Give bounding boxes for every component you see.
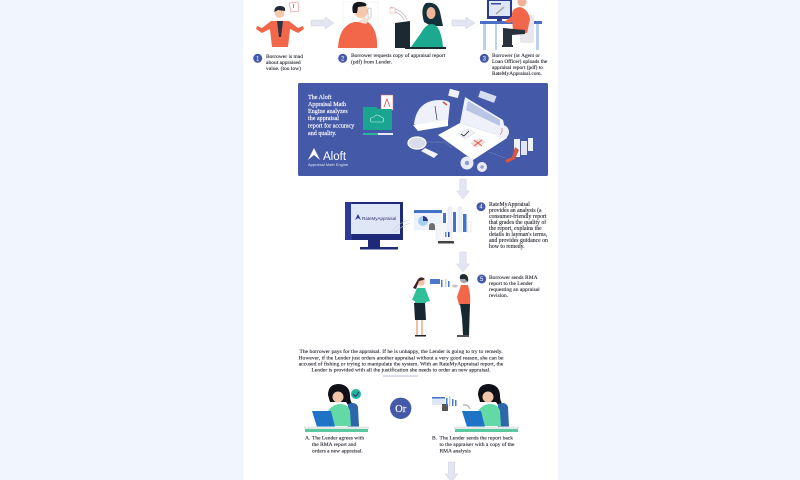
heading: banner text: the appraisal	[308, 116, 339, 122]
text: step 1: Borrower is mad	[266, 54, 303, 60]
illustration: mini bars with arrow	[505, 138, 533, 163]
logo: RateMyAppraisal: RateMyAppraisal	[362, 216, 396, 221]
icon: step 2 number	[338, 54, 347, 63]
text: step 5: revision.	[489, 293, 509, 299]
text: explanation paragraph: accused of fishing or trying to manipulate the system. With an RateMyAppraisal report, the	[299, 361, 504, 368]
text: step 3: RateMyAppraisal.com.	[492, 71, 542, 77]
text: step 4: RateMyAppraisal	[489, 202, 530, 208]
logo: Aloft	[308, 148, 349, 167]
text: option B: to the appraiser with a copy of the	[440, 441, 515, 448]
illustration: RateMyAppraisal monitor	[345, 202, 410, 250]
text: option B: B.	[432, 436, 438, 442]
illustration: laptop with report	[425, 89, 509, 160]
icon: Or badge: Or	[395, 404, 407, 415]
logo: Aloft: Aloft	[323, 151, 347, 163]
text: step 2: Borrower requests copy of appraisal report	[351, 52, 446, 59]
icon: gears	[460, 156, 487, 172]
text: explanation paragraph: The borrower pays for the appraisal. If he is unhappy, the Lender is going to try to remedy.	[299, 348, 503, 355]
illustration: borrower on phone and lender at desk	[338, 2, 446, 49]
text: step 4: the report, explains the	[489, 226, 542, 232]
logo: Aloft: Appraisal Math Engine	[308, 162, 349, 167]
text: step 5: requesting an appraisal	[489, 287, 540, 293]
illustration: report charts	[414, 207, 471, 244]
arrow: banner to step 4	[456, 179, 470, 199]
illustration: lender agrees at laptop	[304, 384, 369, 432]
text: step 2: (pdf) from Lender.	[351, 58, 393, 66]
illustration: magnifier	[408, 137, 438, 158]
text: explanation paragraph: Lender is provided with all the justification she needs to order an new appraisal.	[311, 367, 491, 374]
text: step 4: and provides guidance on	[489, 238, 548, 244]
text: step 3: Loan Officer) uploads the	[492, 58, 548, 65]
text: option B: RMA analysis	[440, 448, 471, 454]
text: explanation paragraph: However, if the Lender just orders another appraisal without a very good reason, she can be	[299, 354, 504, 361]
icon: Or badge	[390, 398, 411, 419]
icon: step 1 number	[253, 54, 262, 63]
text: step 4: that grades the quality of	[489, 219, 546, 226]
arrow: step 1 to 2	[311, 17, 334, 29]
icon: step 5 number: 5	[480, 277, 484, 283]
panel: Aloft Appraisal Math Engine banner	[298, 83, 548, 176]
heading: banner text: report for accuracy	[308, 122, 355, 130]
arrow: continue downward	[445, 462, 458, 480]
icon: step 2 number: 2	[341, 56, 345, 62]
content column	[243, 0, 558, 480]
text: step 4: details in layman's terms,	[489, 232, 548, 238]
arrow: step 4 to 5	[456, 252, 470, 272]
text: option A: A.	[305, 436, 311, 442]
icon: step 5 number	[477, 274, 486, 284]
icon: step 3 number: 3	[483, 56, 487, 62]
icon: step 3 number	[480, 54, 489, 63]
text: step 1: about appraised	[266, 60, 301, 66]
text: step 5: Borrower sends RMA	[489, 275, 538, 281]
icon: step 4 number	[476, 202, 486, 211]
text: option A: The Lender agrees with	[312, 436, 364, 442]
icon: step 4 number: 4	[479, 205, 483, 211]
icon: step 1 number: 1	[256, 56, 260, 62]
illustration: lender and borrower talking	[412, 274, 470, 337]
text: step 4: consumer-friendly report	[489, 213, 547, 220]
illustration: gauge	[413, 100, 450, 131]
text: option A: orders a new appraisal.	[312, 448, 363, 454]
illustration: borrower uploading at computer	[480, 0, 542, 50]
text: step 4: provides an analysis (a	[489, 207, 542, 214]
illustration: angry borrower	[256, 2, 304, 47]
text: step 1: value. (too low)	[266, 65, 301, 72]
icon: pdf and cloud folder	[363, 95, 393, 135]
text: step 3: Borrower (or Agent or	[492, 52, 540, 59]
text: step 5: report to the Lender	[489, 281, 533, 287]
text: step 3: appraisal report (pdf) to	[492, 64, 543, 71]
text: option A: the RMA report and	[312, 442, 356, 448]
heading: banner text: The Aloft	[308, 94, 332, 101]
heading: banner text: Engine analyzes	[308, 109, 348, 115]
icon: check badge	[351, 389, 361, 399]
text: step 4: how to remedy.	[489, 244, 525, 250]
arrow: step 2 to 3	[452, 17, 475, 29]
text: option B: The Lender sends the report back	[440, 436, 513, 442]
heading: banner text: Appraisal Math	[308, 102, 346, 108]
heading: banner text: and quality.	[308, 131, 337, 137]
illustration: lender sends report to appraiser	[432, 384, 519, 432]
